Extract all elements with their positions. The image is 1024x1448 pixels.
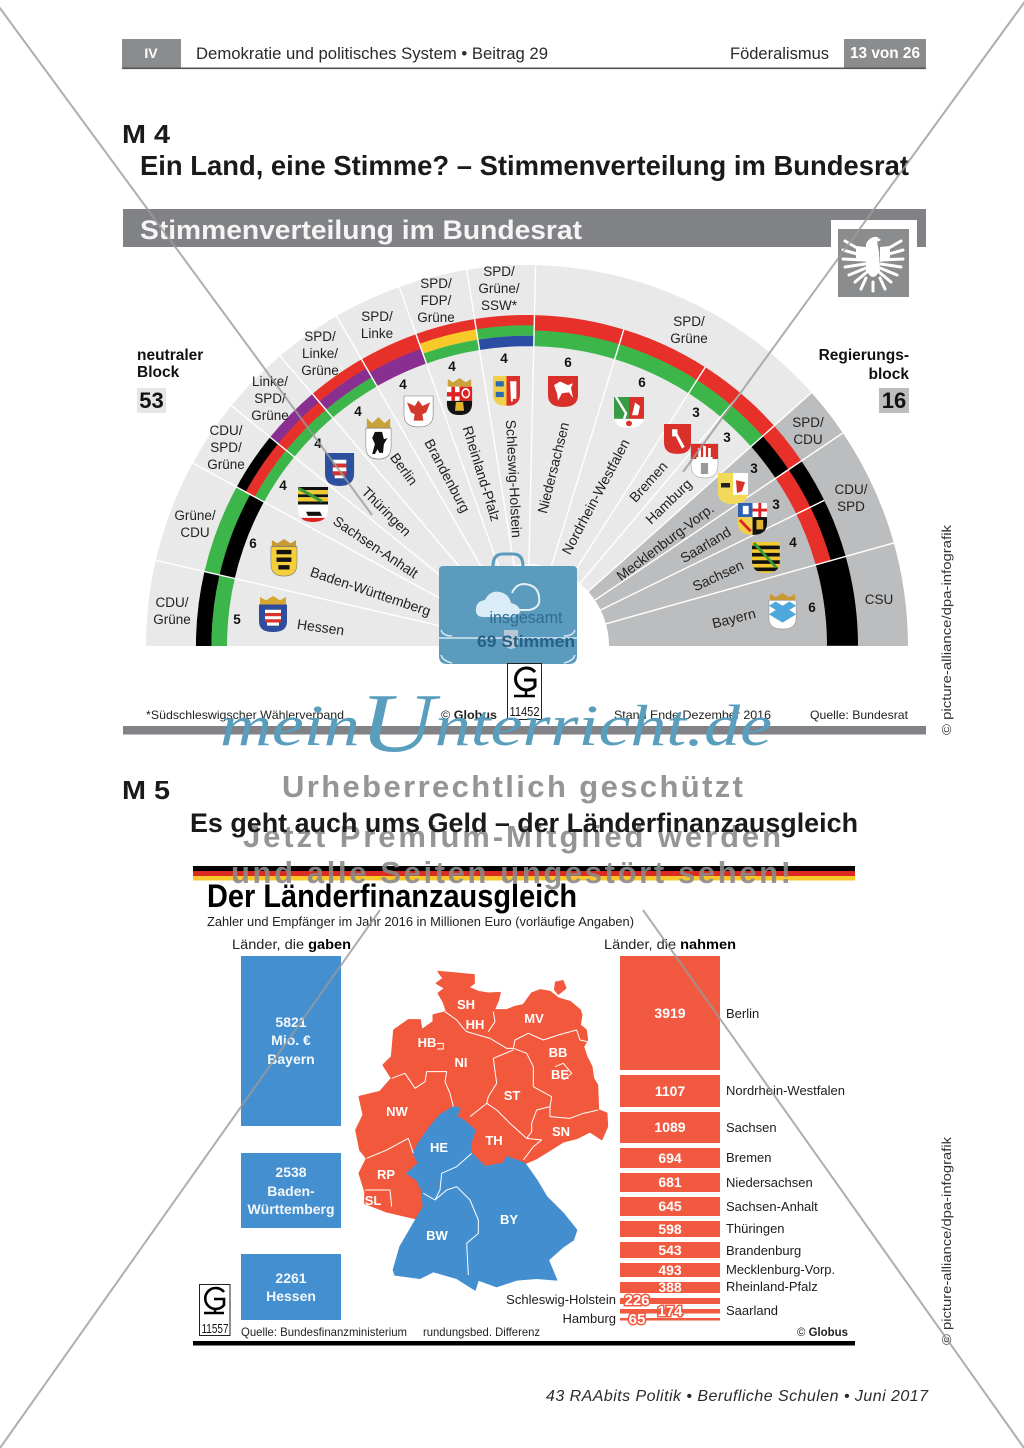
panel: Bundesrat chart — [123, 209, 926, 734]
heading: M 5 title: Es geht auch ums Geld – der Länderfinanzausgleich — [190, 808, 858, 838]
coalition labels: SPD/ — [210, 440, 242, 455]
state names: Hamburg — [642, 476, 695, 527]
bars: receiving states: 1107 — [655, 1083, 685, 1099]
chart footer notes: Quelle: Bundesrat — [810, 708, 909, 722]
coalition labels: Grüne/ — [478, 281, 520, 296]
panel bottom bar — [193, 1341, 855, 1346]
coalition labels: CDU — [793, 432, 823, 447]
bars: receiving states: 65 — [629, 1311, 645, 1328]
bars: receiving states: Niedersachsen — [726, 1175, 813, 1190]
map of Germany: SH — [457, 997, 475, 1012]
state names: Nordrhein-Westfalen — [558, 436, 633, 557]
coalition labels: Linke/ — [302, 346, 338, 361]
bar: Hessen — [241, 1254, 341, 1320]
state names: Niedersachsen — [534, 421, 572, 515]
vote counts: 4 — [354, 404, 362, 419]
logo: Globus 11452 — [508, 664, 542, 720]
logo: Globus 11557: 11557 — [202, 1322, 229, 1336]
icon: coat of arms Bayern — [769, 593, 796, 629]
vote counts: 4 — [500, 351, 508, 366]
page footer: 43 RAAbits Politik • Berufliche Schulen • Juni 2017 — [546, 1388, 929, 1405]
map of Germany: ST — [504, 1088, 520, 1103]
coalition labels: Grüne — [670, 331, 708, 346]
German flag stripe — [193, 866, 855, 880]
logo: Globus 11452: 11452 — [510, 704, 540, 719]
state names: Saarland — [677, 523, 734, 566]
bars: receiving states: Saarland — [726, 1303, 778, 1318]
bars: receiving states: 598 — [658, 1221, 682, 1237]
state names: Berlin — [387, 450, 421, 488]
bar: Hessen: 2261 — [275, 1270, 307, 1286]
chart footer notes — [146, 708, 909, 722]
photo credit bottom: © picture-alliance/dpa-infografik — [939, 1136, 954, 1345]
icon: coat of arms Mecklenburg-Vorpommern — [718, 473, 748, 504]
block label: neutraler Block — [137, 347, 203, 413]
bars: receiving states: Berlin — [726, 1006, 759, 1021]
map of Germany: BW — [426, 1228, 449, 1243]
coalition labels: SPD/ — [792, 415, 824, 430]
bars: receiving states: Schleswig-Holstein — [506, 1292, 616, 1307]
coalition labels: Linke — [361, 326, 393, 341]
coalition labels: SPD/ — [420, 276, 452, 291]
bars: receiving states: Mecklenburg-Vorp. — [726, 1262, 835, 1277]
vote counts: 4 — [448, 359, 456, 374]
vote counts: 3 — [723, 430, 731, 445]
coalition labels: SPD/ — [304, 329, 336, 344]
logo: Globus 11557 — [200, 1284, 230, 1336]
state names: Sachsen-Anhalt — [330, 513, 421, 581]
coalition labels: CSU — [865, 592, 893, 607]
icon: coat of arms Saarland — [738, 503, 767, 535]
bars: receiving states: Hamburg — [563, 1311, 616, 1326]
map of Germany — [356, 972, 607, 1290]
watermark logo: U — [360, 677, 441, 770]
vote counts: 6 — [808, 600, 816, 615]
icon: coat of arms Schleswig-Holstein — [493, 376, 520, 406]
bar: Baden-Württemberg: 2538 — [275, 1164, 307, 1180]
map of Germany: BB — [549, 1045, 567, 1060]
heading: M 4 title: Ein Land, eine Stimme? – Stimmenverteilung im Bundesrat — [140, 150, 909, 181]
vote counts — [233, 351, 816, 627]
bars: receiving states: 645 — [658, 1198, 682, 1214]
watermark text: premium: Jetzt Premium-Mitglied werden — [243, 819, 781, 854]
bars: receiving states: 3919 — [654, 1005, 686, 1021]
coalition labels: SPD/ — [483, 264, 515, 279]
coalition labels: CDU — [180, 525, 210, 540]
column heading: nahmen: Länder, die nahmen — [604, 937, 736, 952]
icon: briefcase watermark with total votes — [439, 554, 577, 664]
bar: Bayern — [241, 956, 341, 1126]
panel subtitle: Zahler und Empfänger im Jahr 2016 in Millionen Euro (vorläufige Angaben) — [207, 915, 634, 929]
bars: receiving states: Thüringen — [726, 1221, 785, 1236]
coalition labels: Grüne — [417, 310, 455, 325]
vote counts: 4 — [279, 478, 287, 493]
icon: coat of arms Thüringen — [325, 453, 354, 486]
map of Germany: NI — [454, 1055, 468, 1070]
bars: receiving states: Rheinland-Pfalz — [726, 1279, 818, 1294]
coalition labels: FDP/ — [421, 293, 452, 308]
map of Germany: RP — [377, 1167, 395, 1182]
bar: Baden-Württemberg — [241, 1153, 341, 1228]
watermark text: copyright: Urheberrechtlich geschützt — [282, 769, 743, 804]
page header: Demokratie und politisches System • Beitrag 29 — [196, 45, 548, 63]
state names: Thüringen — [359, 484, 414, 539]
bars: receiving states: 694 — [658, 1150, 682, 1166]
coalition labels: SPD/ — [254, 391, 286, 406]
source notes — [241, 1325, 848, 1339]
map of Germany: SL — [365, 1193, 381, 1208]
icon: coat of arms Baden-Württemberg — [271, 539, 297, 576]
icon: coat of arms Nordrhein-Westfalen — [614, 397, 644, 428]
heading: M 5: M 5 — [122, 775, 170, 805]
vote counts: 5 — [233, 612, 241, 627]
block label: Regierungsblock — [819, 347, 909, 413]
icon: coat of arms Brandenburg — [404, 396, 433, 427]
coalition colour arcs — [201, 320, 853, 646]
coalition labels: Grüne — [251, 408, 289, 423]
chart bottom bar — [123, 726, 926, 734]
bars: receiving states: Sachsen-Anhalt — [726, 1199, 818, 1214]
source notes: rundungsbed. Differenz — [423, 1325, 540, 1339]
vote counts: 6 — [638, 375, 646, 390]
bars: receiving states: 1089 — [654, 1119, 686, 1135]
photo credit top: © picture-alliance/dpa-infografik — [939, 524, 954, 735]
bars: receiving states — [506, 956, 845, 1328]
state names: Hessen — [296, 616, 345, 638]
state names: Schleswig-Holstein — [503, 419, 525, 538]
coalition labels: CDU/ — [834, 482, 868, 497]
state names: Rheinland-Pfalz — [460, 424, 504, 523]
icon: briefcase watermark with total votes: insgesamt — [490, 609, 563, 627]
block label: neutraler Block: neutraler — [137, 347, 203, 364]
coalition labels: Grüne — [153, 612, 191, 627]
bars: receiving states: Brandenburg — [726, 1243, 801, 1258]
coalition labels: SPD/ — [673, 314, 705, 329]
watermark logo: nterricht.de — [435, 693, 772, 758]
coalition labels: Grüne — [207, 457, 245, 472]
bar: Hessen: Hessen — [266, 1288, 316, 1304]
map of Germany: HB — [418, 1035, 436, 1050]
watermark logo: mein — [220, 693, 360, 758]
page header: Föderalismus — [730, 45, 829, 63]
block label: neutraler Block: 53 — [139, 388, 164, 413]
bars: receiving states: 226 — [624, 1292, 650, 1309]
state names: Bayern — [710, 605, 757, 631]
icon: coat of arms Berlin — [366, 417, 391, 459]
map of Germany: BY — [500, 1212, 518, 1227]
bar: Baden-Württemberg: Baden- — [267, 1183, 315, 1199]
block label: Regierungsblock: 16 — [882, 388, 906, 413]
block label: Regierungsblock: Regierungs- — [819, 347, 909, 364]
map of Germany: TH — [485, 1133, 503, 1148]
bars: receiving states: 388 — [658, 1279, 682, 1295]
bars: receiving states: Sachsen — [726, 1120, 777, 1135]
chart banner — [123, 209, 926, 247]
state names: Mecklenburg-Vorp. — [613, 500, 717, 584]
map of Germany: HH — [466, 1017, 484, 1032]
chart sectors background — [146, 265, 908, 646]
coalition labels: Linke/ — [252, 374, 288, 389]
icon: federal eagle — [838, 229, 909, 297]
coalition labels: Grüne — [301, 363, 339, 378]
coalition labels: Grüne/ — [174, 508, 216, 523]
vote counts: 6 — [249, 536, 257, 551]
chart banner: Stimmenverteilung im Bundesrat — [140, 215, 582, 245]
panel title: Der Länderfinanzausgleich: Der Länderfinanzausgleich — [207, 878, 577, 914]
block label: Regierungsblock: block — [869, 366, 909, 383]
state names — [296, 419, 757, 638]
heading: M 4: M 4 — [122, 119, 171, 149]
chart footer notes: Stand Ende Dezember 2016 — [614, 708, 771, 722]
icon: briefcase watermark with total votes: 69 Stimmen — [477, 632, 575, 651]
page header: 13 von 26 — [850, 45, 920, 62]
vote counts: 3 — [692, 405, 700, 420]
panel: Länderfinanzausgleich — [193, 866, 855, 1346]
chart footer notes: *Südschleswigscher Wählerverband — [146, 708, 344, 722]
vote counts: 6 — [564, 355, 572, 370]
bar: Bayern: 5821 — [275, 1014, 307, 1030]
map of Germany: HE — [430, 1140, 448, 1155]
icon: coat of arms Sachsen-Anhalt — [298, 487, 328, 522]
bars: receiving states: Nordrhein-Westfalen — [726, 1083, 845, 1098]
coalition labels: SPD — [837, 499, 865, 514]
vote counts: 3 — [750, 461, 758, 476]
page header — [122, 39, 926, 69]
coalition labels — [153, 264, 893, 627]
column heading: gaben: Länder, die gaben — [232, 937, 351, 952]
icon: coat of arms Niedersachsen — [548, 376, 578, 407]
state names: Baden-Württemberg — [308, 564, 433, 619]
vote counts: 4 — [789, 535, 797, 550]
map of Germany: SN — [552, 1124, 570, 1139]
vote counts: 3 — [772, 497, 780, 512]
bars: receiving states: 174 — [657, 1303, 683, 1320]
vote counts: 4 — [314, 436, 322, 451]
icon: coat of arms Rheinland-Pfalz — [447, 378, 472, 415]
block label: neutraler Block: Block — [137, 364, 180, 381]
source notes: © Globus — [797, 1325, 848, 1339]
state names: Brandenburg — [421, 436, 473, 515]
source notes: Quelle: Bundesfinanzministerium — [241, 1325, 407, 1339]
map of Germany: BE — [551, 1067, 569, 1082]
coalition labels: SPD/ — [361, 309, 393, 324]
bar: Bayern: Bayern — [267, 1051, 315, 1067]
icon: coat of arms Hamburg — [691, 444, 718, 478]
state names: Bremen — [626, 458, 671, 505]
watermark text: undisturbed: und alle Seiten ungestört sehen! — [231, 855, 791, 890]
coalition labels: SSW* — [481, 298, 518, 313]
bars: receiving states: 543 — [658, 1242, 682, 1258]
icon: coat of arms Sachsen — [752, 542, 780, 573]
chart footer notes: © Globus — [441, 708, 497, 722]
sector divider lines — [156, 265, 894, 628]
coalition labels: CDU/ — [210, 423, 243, 438]
bar: Baden-Württemberg: Württemberg — [247, 1201, 335, 1217]
vote counts: 4 — [399, 377, 407, 392]
state names: Sachsen — [690, 557, 746, 594]
bars: receiving states: 681 — [658, 1174, 682, 1190]
bars: receiving states: Bremen — [726, 1150, 772, 1165]
icon: coat of arms Hessen — [259, 596, 287, 632]
bars: receiving states: 493 — [658, 1262, 682, 1278]
icon: coat of arms Bremen — [664, 424, 691, 454]
page header: IV — [144, 45, 158, 61]
map of Germany: MV — [524, 1011, 544, 1026]
coalition labels: CDU/ — [156, 595, 189, 610]
map of Germany: NW — [386, 1104, 409, 1119]
bar: Bayern: Mio. € — [271, 1032, 311, 1048]
